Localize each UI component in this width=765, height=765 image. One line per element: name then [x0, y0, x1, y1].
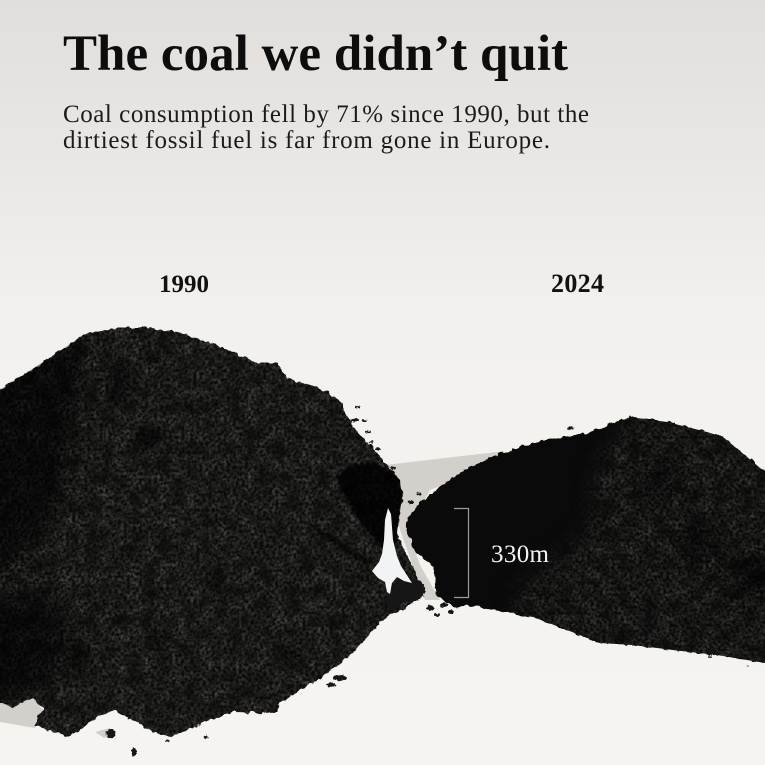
- coal specks: 2024: [426, 426, 750, 667]
- coal pile: 1990: [0, 327, 425, 756]
- icon: Eiffel Tower: [372, 508, 412, 594]
- tower shadow on pile: [336, 462, 402, 548]
- coal specks: 1990: [106, 406, 422, 756]
- shaded side of pile: [0, 340, 85, 570]
- scale bracket: [454, 508, 468, 598]
- subtitle: Coal consumption fell by 71% since 1990, but the: [63, 101, 589, 128]
- label: 1990: 1990: [159, 271, 209, 298]
- label: 330m: 330m: [491, 541, 550, 568]
- subtitle: dirtiest fossil fuel is far from gone in Europe.: [63, 127, 550, 154]
- subtitle: [63, 101, 589, 154]
- label: 2024: 2024: [551, 269, 604, 298]
- coal lump at tower base: [385, 578, 425, 608]
- ground shadows: [0, 451, 505, 738]
- coal pile: 2024: [406, 416, 765, 666]
- title: The coal we didn’t quit: [63, 26, 568, 82]
